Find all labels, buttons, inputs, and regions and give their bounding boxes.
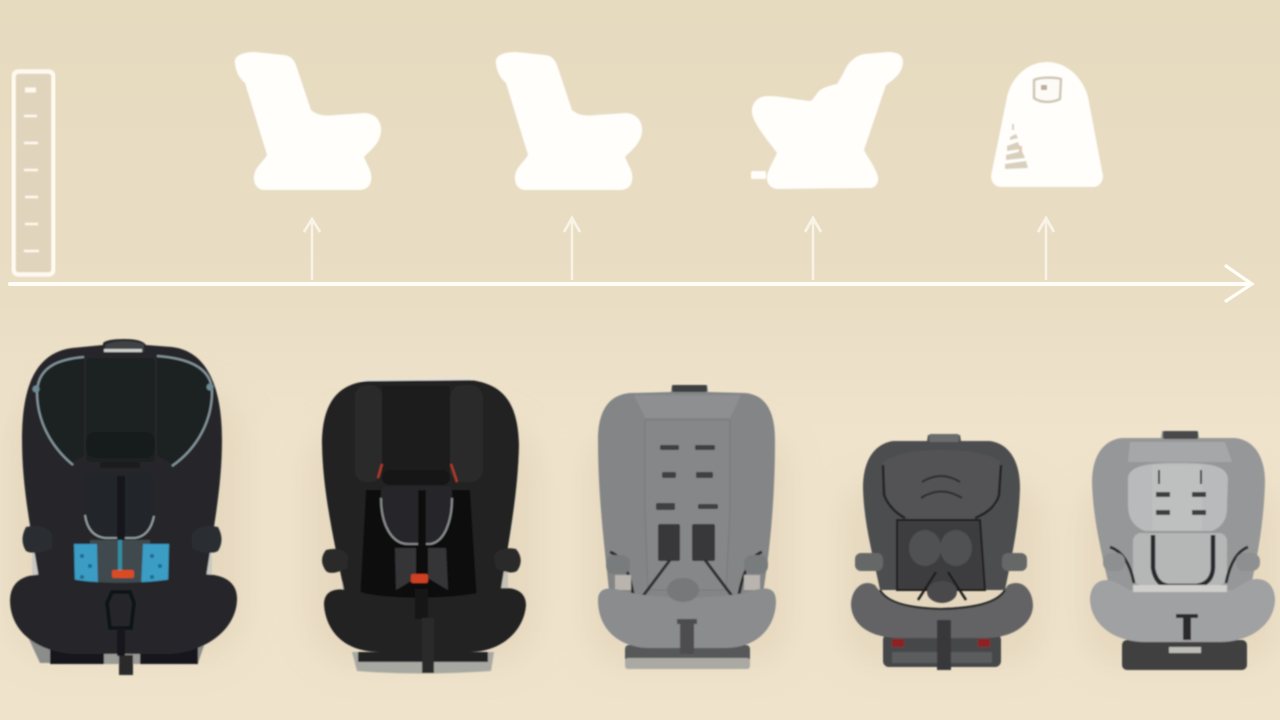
- seat 3 cushion: [598, 588, 776, 648]
- seat 5 cushion: [1090, 579, 1275, 642]
- seat 1 side frame: [32, 550, 212, 590]
- seat 5 harness slots: [1156, 470, 1206, 515]
- icon: booster back silhouette: [991, 62, 1103, 187]
- height ruler icon: [14, 72, 54, 274]
- seat 1 lower insert: [90, 540, 150, 590]
- milestone arrow 1: [304, 219, 320, 280]
- seat 1 backrest: [22, 339, 222, 585]
- seat 3 harness slots: [656, 445, 718, 510]
- seat 5 backrest: [1092, 431, 1265, 590]
- seat 4 head cushion: [882, 450, 1002, 520]
- seat 1 blue pads: [74, 544, 98, 588]
- seat 1 piping: [37, 356, 212, 466]
- seat 5 light head cushion: [1128, 463, 1228, 531]
- icon: rear-facing seat silhouette: [751, 52, 903, 189]
- seat 1 buckle: [112, 570, 134, 578]
- seat 2 backrest: [322, 380, 519, 595]
- seat 1 head wing pads: [39, 358, 84, 462]
- seat 5 T buckle: [1176, 614, 1198, 618]
- timeline arrow: [10, 266, 1252, 301]
- seat 5 lower panel: [1133, 533, 1227, 585]
- car seat 1: black with blue pads: [10, 339, 237, 675]
- seat 2 chest pad: [381, 486, 452, 544]
- seat 2 head pads: [355, 385, 382, 482]
- seat 2 red straps: [378, 464, 457, 482]
- seat 4 backrest: [863, 435, 1020, 590]
- seat 4 strap: [937, 620, 951, 670]
- soft shadows behind seats: [8, 390, 1278, 665]
- seat 3 arm rests: [606, 555, 630, 574]
- seat 4 cushion: [851, 583, 1033, 638]
- seat 2 base: [352, 652, 494, 674]
- seat 1 arm rests: [22, 526, 52, 553]
- seat 5 arm rests: [1103, 553, 1125, 571]
- seat 3 straps: [658, 524, 680, 561]
- seat 5 black U strap: [1153, 535, 1213, 586]
- seat 3 top band: [634, 395, 741, 418]
- seat 2 arm rests: [322, 549, 348, 573]
- seat 1 chest pad: [84, 472, 154, 538]
- icon: forward-facing seat silhouette 1: [235, 52, 381, 190]
- seat 2 harness panel: [360, 490, 477, 600]
- car seat 4: dark grey compact: [851, 434, 1033, 670]
- seat 3 crotch pad: [667, 578, 699, 602]
- seat 3 base: [625, 645, 750, 662]
- seat 2 cushion: [324, 588, 526, 652]
- car seat 5: light grey compact: [1090, 431, 1275, 670]
- seat 2 side frame: [342, 560, 508, 596]
- seat 4 arm rests: [855, 553, 883, 571]
- seat 5 base: [1122, 640, 1247, 670]
- seat 2 buckle: [411, 574, 428, 583]
- car seat 2: black with chrome base: [322, 379, 526, 674]
- seat 1 cushion: [10, 574, 237, 654]
- seat 1 base: [28, 637, 207, 663]
- milestone arrow 4: [1038, 218, 1054, 280]
- seat 3 backrest: [598, 385, 775, 600]
- seat 4 base: [883, 634, 1001, 667]
- seat 4 harness frame: [897, 520, 985, 590]
- milestone arrow 3: [805, 218, 821, 280]
- car seat 3: grey tall: [598, 385, 776, 669]
- seat 3 inner panel: [645, 420, 730, 590]
- milestone arrow 2: [564, 218, 580, 280]
- icon: forward-facing seat silhouette 2: [496, 52, 642, 190]
